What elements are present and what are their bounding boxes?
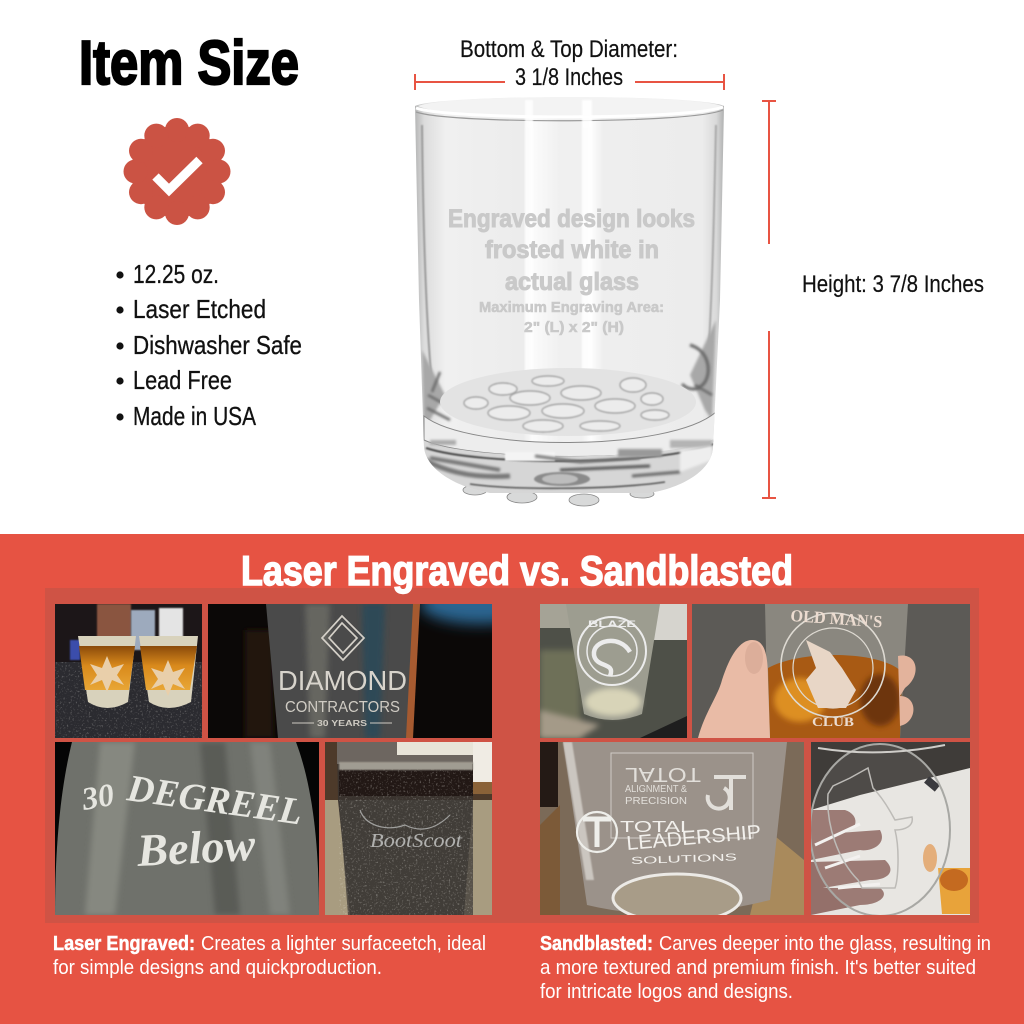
bullet: capacity: 12.25 oz. [133, 259, 219, 289]
hand: thumb and palm [698, 640, 770, 738]
caption: Sandblasted: for intricate logos and designs. [540, 981, 793, 1003]
arrow: height dimension line [762, 101, 776, 498]
icon: scalloped check badge [124, 118, 230, 225]
engraving note: actual glass [505, 268, 639, 296]
photo: 30 Degrees Below glass: 30 [78, 776, 117, 817]
caption: Laser Engraved [53, 933, 486, 979]
floor disk [440, 368, 696, 436]
photo: Total Leadership rocks glass: TOTAL [625, 763, 701, 785]
photo: dark liquid glass with Boot logo [325, 742, 492, 915]
bullet: lead free: Lead Free [133, 365, 232, 395]
panel: photo grid backing [45, 588, 979, 923]
glass body [415, 97, 724, 493]
photo: dragon shot glass [540, 604, 687, 738]
photo: Total Leadership rocks glass: LEADERSHIP [626, 821, 762, 855]
caption: Sandblasted: Carves deeper into the glass, resulting in [659, 933, 991, 955]
photo: Diamond Contractors pint glass: 30 YEARS [317, 719, 368, 728]
diamond logo [322, 616, 364, 660]
engraving note: Maximum Engraving Area: [479, 299, 664, 316]
panel: comparison section background [0, 534, 1024, 1024]
photo: 30 Degrees Below glass [55, 742, 319, 915]
feature list [116, 259, 302, 431]
base side refraction [421, 351, 445, 428]
heading: Laser Engraved vs. Sandblasted: Laser Engraved vs. Sandblasted [241, 547, 793, 594]
height label: Height: 3 7/8 Inches [802, 271, 984, 298]
bullet: capacity [116, 259, 219, 289]
cat engraving [828, 768, 912, 888]
caption: Sandblasted: a more textured and premium finish. It's better suited [540, 957, 976, 979]
glass feet [463, 485, 654, 506]
photo: Old Man's Club whiskey glass in hand: OLD MAN'S [790, 606, 883, 631]
photo: Diamond Contractors pint glass [208, 604, 492, 738]
engraving note: 2" (L) x 2" (H) [524, 319, 624, 336]
dimples [464, 376, 669, 432]
dragon emblem [578, 617, 646, 685]
caption: Laser Engraved: Laser Engraved: [53, 933, 195, 955]
photo: Total Leadership rocks glass: TOTAL [620, 819, 693, 836]
photo: 30 Degrees Below glass: DEGREEL [124, 767, 305, 833]
photo: Diamond Contractors pint glass: CONTRACTORS [285, 699, 400, 716]
photo: Old Man's Club whiskey glass in hand: CLUB [812, 714, 854, 729]
glass illustration [415, 97, 724, 506]
engraving note [448, 205, 695, 336]
caption: Laser Engraved: for simple designs and quickproduction. [53, 957, 382, 979]
photo: Total Leadership rocks glass: SOLUTIONS [631, 852, 738, 867]
right shot glass [139, 636, 198, 708]
photo: 30 Degrees Below glass: Below [135, 819, 257, 876]
hand seen through glass [811, 810, 890, 915]
caption: Sandblasted: Sandblasted: [540, 933, 653, 955]
engraving note: Engraved design looks [448, 205, 695, 233]
photo: dragon shot glass: BLAZE [588, 619, 636, 629]
caption: Sandblasted [540, 933, 991, 1003]
photo: Total Leadership rocks glass [540, 742, 804, 922]
light streaks [525, 100, 533, 390]
photo: Diamond Contractors pint glass: DIAMOND [278, 665, 407, 696]
photo: dark liquid glass with Boot logo: BootScoot [370, 830, 462, 852]
inner wall shadows [422, 125, 432, 385]
photo: Total Leadership rocks glass: PRECISION [625, 796, 687, 807]
photo: Old Man's Club whiskey glass in hand [692, 604, 970, 738]
floor edge and solid base [424, 412, 716, 456]
engraving note: frosted white in [485, 236, 659, 264]
diameter label: 3 1/8 Inches [515, 64, 623, 91]
bullet: laser etched: Laser Etched [133, 294, 266, 324]
diameter label [460, 36, 678, 91]
wine glass outline [810, 744, 950, 916]
bullet: dishwasher safe: Dishwasher Safe [133, 330, 302, 360]
left shot glass [78, 636, 136, 708]
bullet: made in USA: Made in USA [133, 401, 257, 431]
rim [418, 98, 722, 110]
photo: shot glasses with amber liquor [55, 604, 202, 738]
heading: Item Size: Item Size [79, 29, 299, 98]
diameter label: Bottom & Top Diameter: [460, 36, 678, 63]
photo: Total Leadership rocks glass: ALIGNMENT & [625, 784, 687, 795]
photo: stemless glass with cat engraving [810, 742, 970, 916]
caption: Laser Engraved: Creates a lighter surfaceetch, ideal [201, 933, 486, 955]
arrow: diameter dimension line [415, 74, 724, 90]
